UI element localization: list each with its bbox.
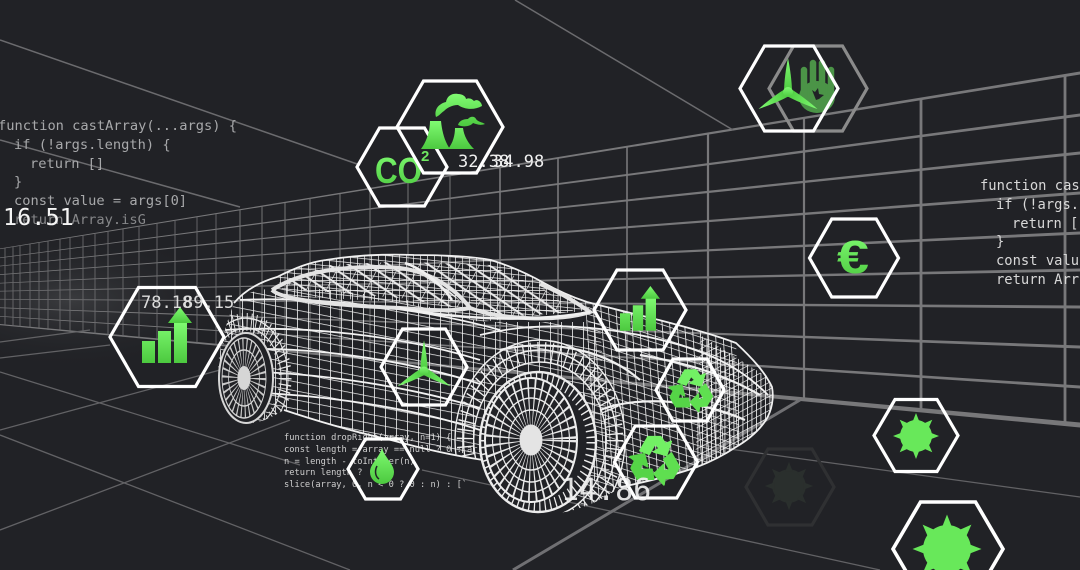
value: 32.38: 32.38 bbox=[458, 152, 509, 172]
value: 34.98: 34.98 bbox=[493, 152, 544, 172]
hexagon: factory with smoke bbox=[397, 81, 503, 173]
hexagon: growth chart left bbox=[110, 288, 224, 386]
car body mesh bbox=[218, 256, 772, 512]
code block: left: } bbox=[14, 174, 22, 190]
code block: left: return Array.isG bbox=[14, 212, 146, 228]
code block: left: const value = args[0] bbox=[14, 193, 187, 209]
hexagon: recycle lower bbox=[614, 426, 698, 498]
wireframe car bbox=[218, 254, 774, 514]
code block: left: function castArray(...args) { bbox=[0, 118, 237, 134]
hexagon: growth chart on car bbox=[594, 270, 686, 350]
value: 16.51: 16.51 bbox=[3, 203, 74, 231]
code block: under car: n = length - toInteger(n) bbox=[284, 457, 415, 467]
rear wheel bbox=[219, 333, 273, 423]
hexagon: CO2 bbox=[357, 128, 447, 206]
hexagon: spiky icon bottom bbox=[893, 502, 1003, 570]
code block: under car: const length = array == null ? 0 : array.length bbox=[284, 445, 530, 455]
hexagon: wind turbine on car bbox=[381, 329, 467, 405]
value: 89.15: 89.15 bbox=[183, 293, 234, 313]
front wheel arch mesh bbox=[454, 339, 626, 512]
car outline and window frames bbox=[234, 255, 773, 487]
code block: left bbox=[0, 118, 237, 228]
code block: under car: return length ? bbox=[284, 468, 362, 478]
hexagon: spiky icon right bbox=[874, 400, 958, 472]
hexagon: euro bbox=[810, 219, 898, 297]
value: 78.18: 78.18 bbox=[141, 293, 192, 313]
hexagon: faded hand bbox=[769, 46, 867, 131]
value: 14.86: 14.86 bbox=[561, 473, 651, 508]
hexagon: water drop bbox=[348, 439, 418, 499]
code block: left: if (!args.length) { bbox=[14, 137, 171, 153]
hexagon: faded spiky icon bbox=[746, 449, 834, 525]
hexagon: CO2: 2 bbox=[421, 148, 429, 165]
code block: under car: function dropRight(array, n=1) { bbox=[284, 433, 451, 443]
code block: under car: slice(array, 0, n < 0 ? 0 : n) : [` bbox=[284, 479, 467, 490]
rear wheel arch mesh bbox=[220, 313, 292, 422]
code block: under car bbox=[284, 433, 530, 490]
hexagon: euro: € bbox=[837, 231, 869, 283]
hexagon: wind turbine top bbox=[740, 46, 838, 131]
hexagon: CO2: CO bbox=[375, 150, 422, 191]
code block: right: } bbox=[996, 234, 1004, 250]
code block: right bbox=[980, 178, 1080, 288]
code block: left: return [] bbox=[30, 156, 104, 172]
floor glow bbox=[0, 230, 240, 370]
hexagon: recycle upper bbox=[656, 359, 724, 421]
front wheel bbox=[480, 372, 596, 512]
